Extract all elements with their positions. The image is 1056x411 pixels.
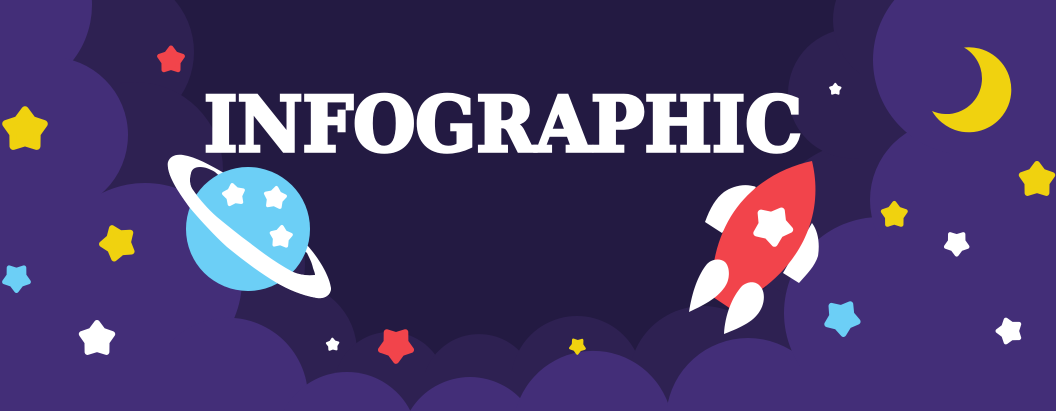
stars [4,48,1052,361]
icon: rocket [689,161,819,334]
star: white small bottom [327,338,339,350]
planet ring front [168,162,331,298]
star: white bottom left [82,323,112,352]
rocket fin lower [783,223,819,283]
star: blue left [4,268,29,291]
star: white small top right [830,84,840,94]
star: yellow small bottom [570,340,585,354]
star: white right [946,234,967,254]
planet ring back [168,155,331,298]
rocket flame left [689,260,729,312]
star: yellow left [98,222,137,261]
icon: crescent moon [932,47,1011,132]
star: red bottom [381,332,411,361]
planet stars [223,183,292,246]
star: yellow far right [1022,164,1052,193]
rocket flame right [724,282,764,334]
icon: ringed planet [168,155,331,298]
star: white bottom right [995,316,1023,344]
rocket star [751,202,796,247]
star: red top left [159,48,183,70]
star: yellow right [883,203,906,225]
title: INFOGRAPHIC [204,80,802,169]
star: yellow large left [6,110,44,146]
rocket body [713,161,815,309]
planet body [186,167,310,291]
rocket fin upper [705,185,756,233]
star: blue right [826,304,859,335]
